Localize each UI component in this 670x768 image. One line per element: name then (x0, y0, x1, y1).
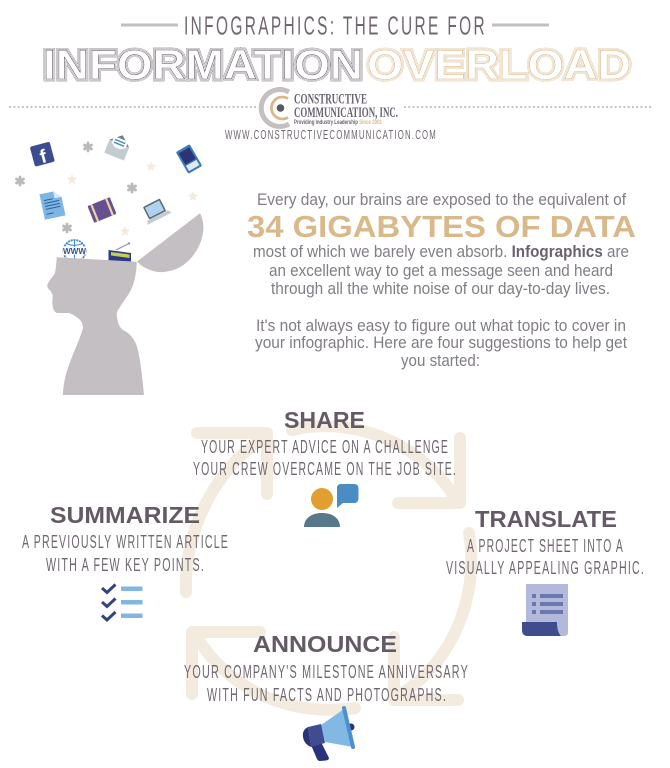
section: announce: WITH FUN FACTS AND PHOTOGRAPHS. (207, 685, 447, 705)
intro text block: you started: (401, 351, 480, 370)
title word: Information: INFORMATION (43, 41, 363, 88)
title word: Overload: OVERLOAD (367, 41, 631, 88)
icon: www globe: WWW (63, 246, 87, 256)
icon: laptop (139, 197, 172, 225)
company logo: CONSTRUCTIVE (294, 92, 367, 108)
statistic: 34 gigabytes of data: 34 GIGABYTES OF DATA (247, 209, 636, 244)
cycle arrows (186, 426, 471, 710)
icon: tablet (176, 144, 202, 174)
section: announce (184, 631, 469, 761)
title line: Infographics the cure for (121, 10, 549, 40)
title word: Information: INFORMATION (43, 41, 363, 88)
section: share: YOUR EXPERT ADVICE ON A CHALLENGE (201, 437, 449, 457)
section: translate: TRANSLATE (475, 506, 617, 532)
intro text block: Every day, our brains are exposed to the equivalent of (257, 190, 626, 209)
title word: Information: INFORMATION (43, 41, 363, 88)
icon: megaphone (303, 708, 354, 761)
section: summarize: WITH A FEW KEY POINTS. (46, 555, 205, 575)
section: announce: YOUR COMPANY'S MILESTONE ANNIVERSARY (184, 662, 469, 682)
icon: facebook (30, 142, 56, 170)
arrow: summarize to share (186, 433, 267, 592)
stars (67, 161, 198, 236)
icon: person with speech bubble (304, 484, 358, 527)
icon: book (88, 197, 116, 223)
intro text block: It's not always easy to figure out what topic to cover in (256, 316, 626, 335)
arrow: share to translate (292, 426, 460, 503)
icon: checklist (102, 584, 142, 620)
intro text block: an excellent way to get a message seen and heard (269, 261, 613, 280)
section: share: SHARE (284, 407, 365, 433)
skull cap (137, 213, 203, 272)
section: share (193, 407, 457, 527)
section: translate (446, 506, 645, 636)
section: summarize (22, 502, 229, 620)
title word: Overload: OVERLOAD (367, 41, 631, 88)
illustration: open head with flying icons (16, 131, 203, 395)
company logo (261, 90, 398, 126)
section: summarize: SUMMARIZE (50, 502, 200, 528)
section: announce: ANNOUNCE (253, 631, 397, 657)
icon: document scroll (522, 584, 568, 636)
title word: Information: INFORMATION (43, 41, 363, 88)
website url: WWW.CONSTRUCTIVECOMMUNICATION.COM (225, 127, 437, 142)
intro text block (247, 190, 636, 370)
section: share: YOUR CREW OVERCAME ON THE JOB SITE. (193, 459, 457, 479)
asterisks (16, 143, 136, 232)
section: summarize: A PREVIOUSLY WRITTEN ARTICLE (22, 532, 229, 552)
intro text block: most of which we barely even absorb. Infographics are (253, 242, 629, 261)
company logo: COMMUNICATION, INC. (294, 105, 398, 121)
arrow: translate to announce (394, 533, 471, 700)
title word: Overload: OVERLOAD (367, 41, 631, 88)
icon: document (40, 190, 65, 220)
arrow: announce to summarize (192, 632, 355, 710)
head silhouette (47, 257, 144, 395)
title word: Overload: OVERLOAD (367, 41, 631, 88)
title word: Overload: OVERLOAD (367, 41, 631, 88)
intro text block: your infographic. Here are four suggestions to help get (255, 333, 627, 352)
icon: radio (108, 242, 131, 263)
title word: Information: INFORMATION (43, 41, 363, 88)
icon: facebook: f (38, 146, 50, 168)
company logo: Providing Industry Leadership Since 2001 (294, 119, 382, 126)
intro text block: through all the white noise of our day-to-day lives. (271, 279, 610, 298)
icon: envelope (104, 131, 132, 160)
icon: www globe (63, 240, 87, 262)
